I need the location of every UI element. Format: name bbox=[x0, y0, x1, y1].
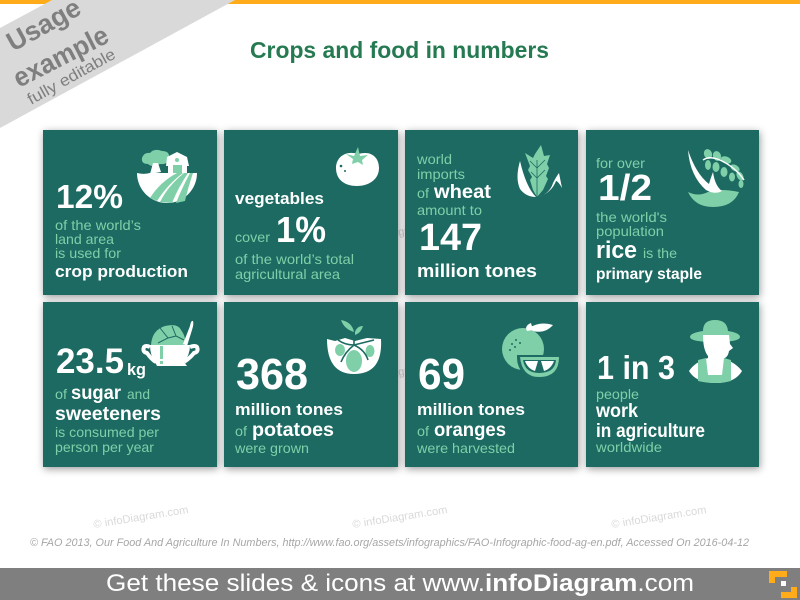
description: and bbox=[127, 386, 150, 402]
stat: 368: 368 bbox=[236, 350, 308, 399]
panel: crop production bbox=[43, 130, 217, 295]
watermarks: © infoDiagram.com bbox=[611, 504, 707, 531]
description bbox=[55, 217, 188, 281]
hidden watermarks behind cards: © infoDiagram.com bbox=[352, 219, 448, 246]
icon: orange bbox=[502, 323, 561, 380]
description: of the world’s total bbox=[235, 251, 354, 267]
description: potatoes bbox=[252, 420, 334, 441]
description: of bbox=[417, 185, 429, 201]
stat: 1/2: 1/2 bbox=[598, 167, 652, 208]
panel: agriculture workers bbox=[586, 302, 759, 467]
rice text: population bbox=[596, 223, 664, 239]
description: million tones bbox=[235, 400, 343, 419]
rice text: primary staple bbox=[596, 266, 702, 283]
description: oranges bbox=[434, 420, 506, 441]
stat: 1 in 3: 1 in 3 bbox=[597, 349, 675, 386]
description: were harvested bbox=[416, 440, 515, 456]
description: million tones bbox=[417, 400, 525, 419]
panel: vegetables bbox=[224, 130, 398, 295]
icon: rice bbox=[688, 148, 745, 207]
icon: tomato bbox=[336, 147, 379, 186]
stat: vegetables 1%: cover bbox=[235, 229, 270, 245]
description: work bbox=[595, 401, 638, 422]
watermarks: © infoDiagram.com bbox=[352, 504, 448, 531]
stat: 23.5 kg: kg bbox=[127, 360, 146, 379]
description: person per year bbox=[55, 439, 154, 455]
description bbox=[416, 400, 525, 456]
description: worldwide bbox=[595, 439, 662, 455]
description: agricultural area bbox=[235, 266, 340, 282]
description: were grown bbox=[234, 440, 309, 456]
stat: 147: 147 bbox=[419, 217, 482, 259]
stat: vegetables 1% bbox=[235, 189, 326, 250]
stat: vegetables 1%: vegetables bbox=[235, 189, 324, 208]
rice text: is the bbox=[643, 245, 677, 261]
rice text: rice bbox=[596, 237, 637, 264]
title: Crops and food in numbers bbox=[250, 37, 549, 63]
rice text bbox=[596, 209, 702, 283]
watermarks: © infoDiagram.com bbox=[93, 504, 189, 531]
panel: sugar bbox=[43, 302, 217, 467]
description: sugar bbox=[71, 383, 122, 404]
top accent bar bbox=[0, 0, 800, 4]
description: amount to bbox=[417, 202, 482, 218]
icon: infoDiagram logo bbox=[769, 571, 797, 598]
description: in agriculture bbox=[596, 421, 705, 442]
description bbox=[234, 400, 343, 456]
description: of bbox=[235, 423, 247, 439]
description: of bbox=[417, 423, 429, 439]
description: land area bbox=[55, 231, 114, 247]
description: people bbox=[596, 386, 639, 402]
hidden watermarks behind cards: © infoDiagram.com bbox=[352, 359, 448, 386]
panel: potatoes bbox=[224, 302, 398, 467]
panel: oranges bbox=[405, 302, 578, 467]
unit: million tones bbox=[417, 261, 537, 281]
usage example ribbon: example bbox=[8, 20, 113, 93]
usage example ribbon: fully editable bbox=[25, 46, 119, 108]
description bbox=[416, 151, 492, 218]
footer bar: Get these slides & icons at www. infoDiagram .com bbox=[106, 570, 694, 597]
rice text: the world's bbox=[596, 209, 667, 225]
watermarks bbox=[93, 504, 707, 531]
icon: potato plant bbox=[327, 320, 381, 374]
panel: wheat bbox=[405, 130, 578, 295]
stat: 69: 69 bbox=[418, 350, 465, 399]
icon: sugar bowl bbox=[143, 321, 198, 366]
description: of bbox=[55, 386, 67, 402]
description: is consumed per bbox=[55, 424, 159, 440]
hidden watermarks behind cards bbox=[352, 219, 448, 386]
icon: farmer bbox=[689, 320, 742, 383]
usage example ribbon bbox=[0, 0, 235, 128]
description: imports bbox=[417, 166, 465, 182]
panel: rice bbox=[586, 130, 759, 295]
description: for over bbox=[596, 155, 645, 171]
description: sweeteners bbox=[55, 404, 161, 425]
description bbox=[595, 386, 705, 455]
stat: 23.5 kg: 23.5 bbox=[56, 342, 124, 381]
description bbox=[235, 251, 354, 282]
source citation: © FAO 2013, Our Food And Agriculture In Numbers, http://www.fao.org/assets/infographics/FAO-Infographic-food-ag-en.pdf, Accessed On 2016-04-12 bbox=[30, 537, 749, 549]
footer bar bbox=[0, 568, 800, 600]
description: of the world’s bbox=[55, 217, 141, 233]
icon: wheat bbox=[518, 145, 562, 197]
stat: 12%: 12% bbox=[56, 178, 123, 215]
stat: vegetables 1%: 1% bbox=[276, 209, 326, 250]
description bbox=[55, 383, 161, 455]
description: wheat bbox=[433, 182, 492, 203]
description: crop production bbox=[55, 262, 188, 281]
description: is used for bbox=[55, 245, 121, 261]
description: world bbox=[416, 151, 452, 167]
icon: farm bbox=[137, 150, 197, 203]
